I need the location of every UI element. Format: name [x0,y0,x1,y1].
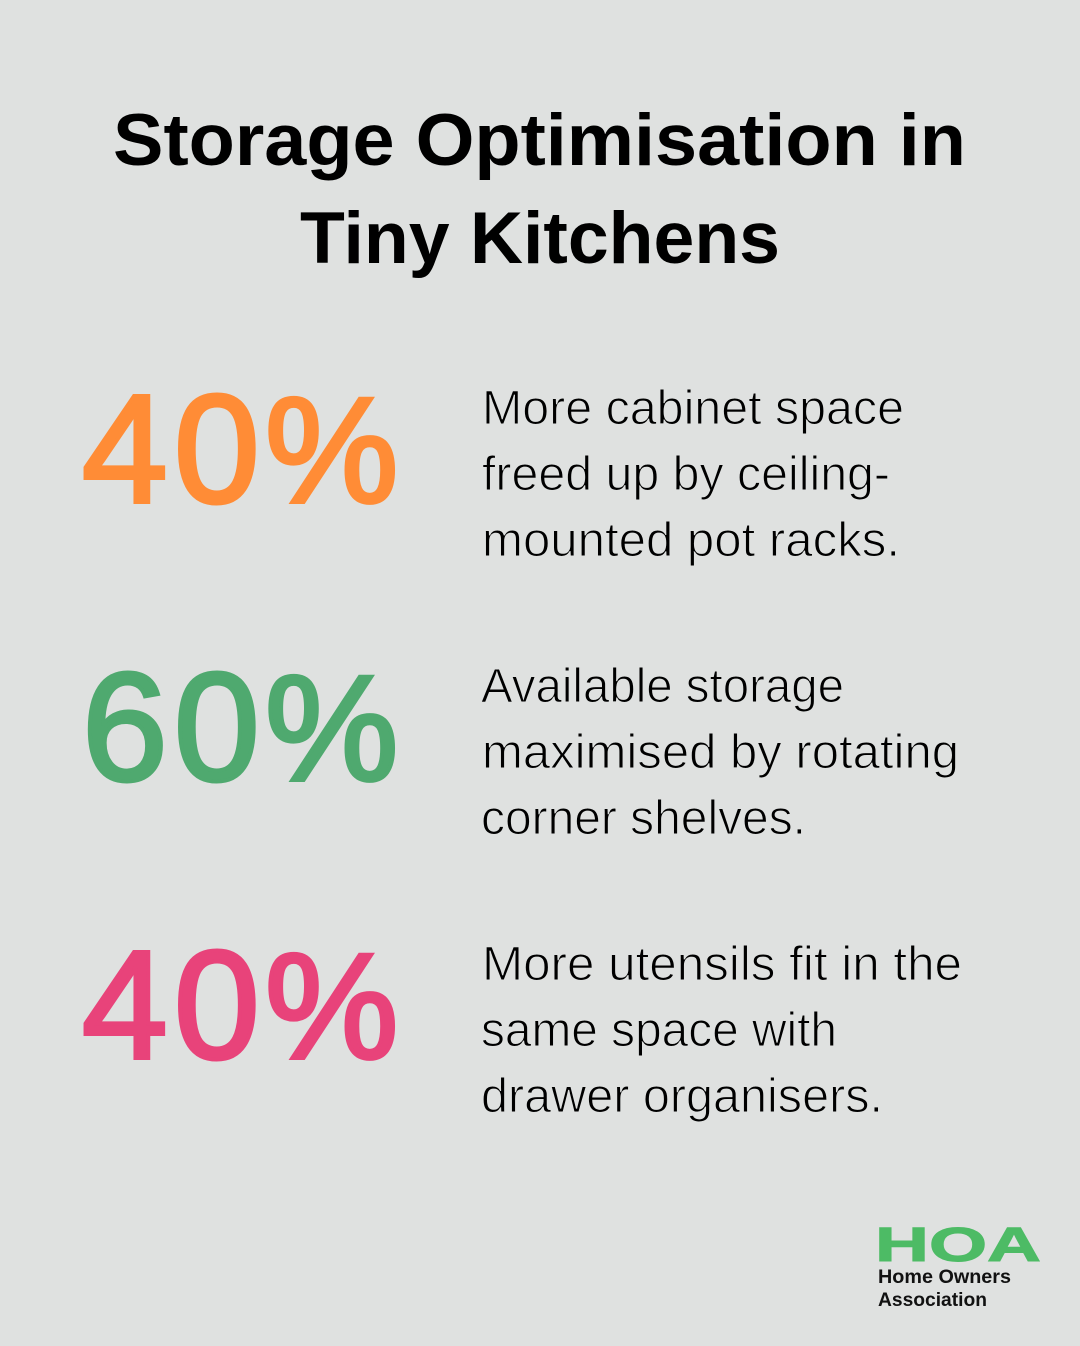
logo: Home Owners Association: Association [878,1289,987,1311]
stat description 2: Available storage [481,659,844,713]
panel: stat 3 [82,919,962,1123]
stat description 2: corner shelves. [481,791,806,845]
stat number: 60% green: % [265,644,398,812]
stat description 2 [481,659,959,845]
stat description 3: same space with [481,1003,837,1057]
panel: stat 2 [82,641,959,845]
title: Storage Optimisation in [113,100,966,181]
stat description 3 [481,937,962,1123]
logo: Home Owners Association: Home Owners [878,1266,1011,1288]
stat description 2: maximised by rotating [482,725,959,779]
stat number: 40% orange: % [265,366,398,534]
stat description 1 [482,381,904,567]
panel: stat 1 [82,363,904,567]
logo: Home Owners Association [875,1219,1041,1311]
stat number: 40% orange: 40 [82,363,260,535]
stat description 3: drawer organisers. [481,1069,883,1123]
title [113,100,966,279]
stat description 3: More utensils fit in the [482,937,962,991]
stat description 1: More cabinet space [482,381,904,435]
stat number: 60% green: 60 [82,641,260,813]
stat number: 40% pink: % [265,922,398,1090]
stat number: 40% pink: 40 [82,919,260,1091]
title: Tiny Kitchens [300,198,780,279]
stat description 1: mounted pot racks. [482,513,900,567]
stat description 1: freed up by ceiling- [482,447,890,501]
logo: Home Owners Association: HOA [875,1219,1041,1272]
